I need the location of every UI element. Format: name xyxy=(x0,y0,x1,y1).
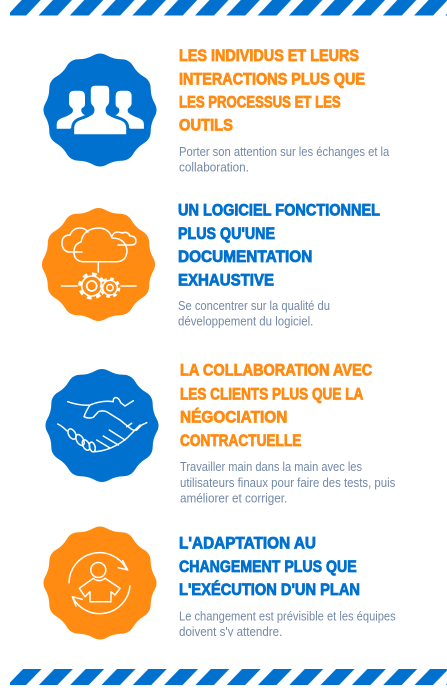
heading: collaboration: NÉGOCIATION xyxy=(180,408,287,427)
text: individus: Porter son attention sur les échanges et la xyxy=(179,144,390,159)
icon: cloud and gears badge xyxy=(42,208,155,321)
text: collaboration: utilisateurs finaux pour faire des tests, puis xyxy=(180,475,396,490)
text: adaptation: doivent s'y attendre. xyxy=(179,624,282,639)
icon: person with cycle arrows badge xyxy=(43,526,157,640)
heading: individus: LES INDIVIDUS ET LEURS xyxy=(179,47,359,65)
heading: logiciel: UN LOGICIEL FONCTIONNEL xyxy=(178,202,380,220)
heading: adaptation: CHANGEMENT PLUS QUE xyxy=(179,558,357,576)
bottom striped band xyxy=(10,669,447,685)
heading: adaptation: L'EXÉCUTION D'UN PLAN xyxy=(179,580,360,599)
heading: collaboration: LA COLLABORATION AVEC xyxy=(180,362,372,380)
heading: logiciel: PLUS QU'UNE xyxy=(178,225,275,243)
text: logiciel: Se concentrer sur la qualité du xyxy=(178,298,330,313)
panel: adaptation xyxy=(43,526,396,640)
top striped band xyxy=(10,0,447,16)
text: adaptation: Le changement est prévisible et les équipes xyxy=(179,608,396,623)
icon: large gear xyxy=(80,274,103,298)
panel: individus xyxy=(43,47,390,175)
text: logiciel: développement du logiciel. xyxy=(178,314,313,329)
heading: individus: OUTILS xyxy=(179,116,233,134)
heading: collaboration: LES CLIENTS PLUS QUE LA xyxy=(180,385,363,403)
panel: collaboration xyxy=(45,362,396,506)
icon: handshake badge xyxy=(45,369,159,482)
text: collaboration: améliorer et corriger. xyxy=(180,491,287,506)
icon: small gear xyxy=(101,279,119,297)
heading: logiciel: EXHAUSTIVE xyxy=(178,272,274,290)
text: collaboration: Travailler main dans la main avec les xyxy=(180,459,362,474)
heading: individus: INTERACTIONS PLUS QUE xyxy=(179,70,365,88)
heading: logiciel: DOCUMENTATION xyxy=(178,248,312,266)
heading: collaboration: CONTRACTUELLE xyxy=(180,432,301,450)
heading: individus: LES PROCESSUS ET LES xyxy=(179,93,341,111)
text: individus: collaboration. xyxy=(179,160,249,175)
icon: people badge xyxy=(43,53,157,167)
heading: adaptation: L'ADAPTATION AU xyxy=(179,535,316,553)
panel: logiciel xyxy=(42,202,380,329)
